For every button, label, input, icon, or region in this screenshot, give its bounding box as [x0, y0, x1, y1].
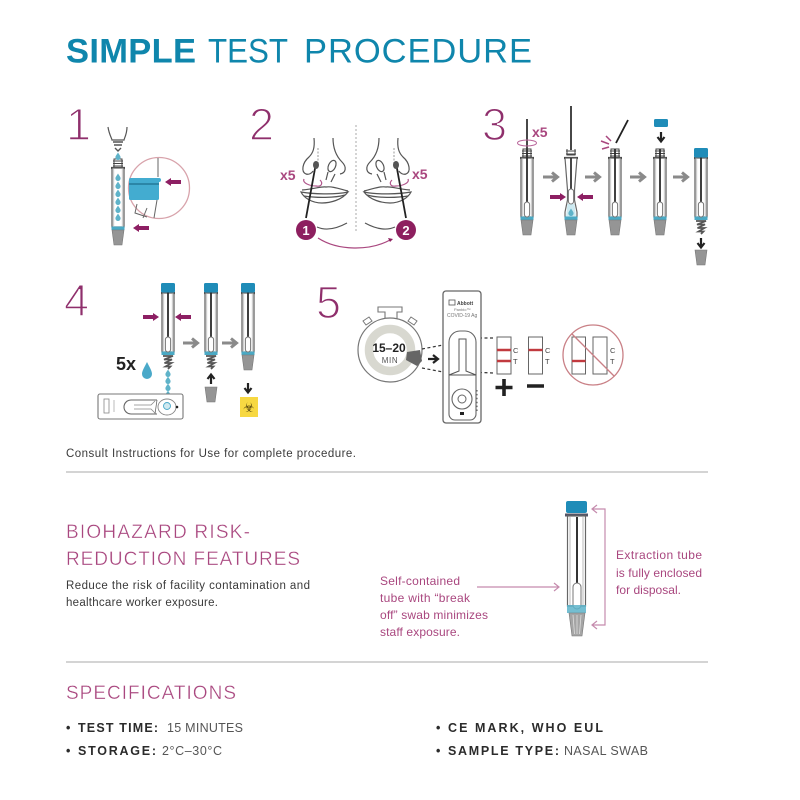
test cassette: Panbio™	[454, 307, 470, 312]
tube a: swab rotated	[520, 119, 534, 235]
title: PROCEDURE	[304, 32, 532, 70]
x5 rotate: x5	[532, 124, 548, 140]
callout: extraction tube enclosed: for disposal.	[616, 583, 681, 597]
centre divider	[355, 125, 357, 233]
callout: extraction tube enclosed: is fully enclosed	[616, 566, 702, 580]
squeeze arrows	[143, 313, 191, 321]
callout: extraction tube enclosed: Extraction tube	[616, 548, 702, 562]
x5 rotate	[518, 124, 548, 146]
spec: test time: •	[66, 721, 70, 735]
x5 left: x5	[280, 167, 296, 183]
stopwatch 15-20 min: 15–20	[372, 341, 406, 355]
icon: large drop	[142, 362, 152, 379]
callout: self-contained tube: off” swab minimizes	[380, 608, 488, 622]
spec: storage: 2°C–30°C	[162, 744, 222, 758]
arrow	[630, 172, 644, 182]
stopwatch 15-20 min: MIN	[382, 356, 398, 365]
title: SIMPLE	[66, 32, 196, 70]
specifications heading: SPECIFICATIONS	[66, 683, 236, 704]
badge 1	[296, 220, 316, 240]
arrow	[543, 172, 558, 182]
spec: sample type: SAMPLE TYPE:	[448, 744, 559, 758]
step number 4: 4	[64, 275, 89, 326]
step 4 panel	[64, 275, 258, 419]
tube b: squeezed	[564, 106, 578, 235]
spec: sample type: NASAL SWAB	[564, 744, 648, 758]
spec: test time: TEST TIME:	[78, 721, 158, 735]
step number 1: 1	[66, 99, 91, 150]
spec: CE mark: CE MARK, WHO EUL	[448, 721, 603, 735]
minus sign	[527, 384, 544, 388]
icon: biohazard bin: ☣	[243, 401, 255, 416]
tube base	[205, 387, 217, 402]
arrow: press cap	[165, 178, 181, 186]
drops of buffer	[115, 152, 121, 221]
tube d: cap added	[653, 119, 668, 235]
plus sign	[496, 379, 512, 396]
biohazard section heading: BIOHAZARD RISK-	[66, 522, 250, 543]
step number 5: 5	[316, 277, 341, 328]
spec: test time: 15 MINUTES	[167, 721, 243, 735]
step number 2: 2	[249, 99, 274, 150]
positive result strip: T	[513, 357, 518, 366]
step 2 panel	[249, 99, 428, 248]
right nostril illustration	[364, 138, 411, 229]
invalid result symbol: T	[610, 357, 615, 366]
positive result strip: C	[513, 346, 519, 355]
spec: CE mark: •	[436, 721, 440, 735]
arrow: press base	[133, 224, 149, 232]
icon: biohazard bin	[240, 397, 258, 417]
spec: sample type: •	[436, 744, 440, 758]
arrow	[673, 172, 688, 182]
callout: self-contained tube: staff exposure.	[380, 625, 460, 639]
drops into test card	[165, 370, 171, 398]
step number 3: 3	[482, 99, 507, 150]
negative result strip: T	[545, 357, 550, 366]
arrow: dispose	[244, 383, 252, 392]
magnified detail circle	[128, 158, 190, 218]
step 1 panel	[66, 99, 190, 245]
icon: extraction tube with drops	[111, 159, 125, 245]
tube with base back on	[241, 283, 255, 370]
step 3 panel	[482, 99, 708, 265]
test cassette	[443, 291, 481, 423]
biohazard section heading: REDUCTION FEATURES	[66, 549, 300, 570]
test cassette: Abbott	[457, 301, 473, 307]
arrow: reattach base	[208, 374, 214, 384]
step 5 panel	[316, 277, 623, 423]
arrow	[428, 355, 438, 363]
tube with base off	[204, 283, 218, 369]
badge 2: 2	[402, 223, 410, 238]
instructions note: Consult Instructions for Use for complete procedure.	[66, 448, 356, 460]
arrow	[183, 338, 198, 348]
title: TEST	[208, 32, 288, 70]
negative result strip	[528, 337, 551, 374]
negative result strip: C	[545, 346, 551, 355]
spec: storage: STORAGE:	[78, 744, 156, 758]
arrow: left to right nostril	[318, 238, 393, 248]
invalid result symbol: C	[610, 346, 616, 355]
biohazard section description: Reduce the risk of facility contamination and	[66, 580, 310, 592]
5x label: 5x	[116, 354, 136, 374]
test cassette: COVID-19 Ag	[447, 313, 478, 319]
callout: self-contained tube: Self-contained	[380, 574, 460, 588]
badge 1: 1	[302, 223, 310, 238]
right swab	[393, 148, 406, 218]
left nostril illustration	[301, 138, 348, 229]
bracket arrow: full tube	[592, 505, 605, 629]
squeeze arrows	[550, 193, 593, 201]
arrow	[585, 172, 600, 182]
arrow	[222, 338, 236, 348]
x5 right: x5	[412, 166, 428, 182]
arrow: to tube	[477, 583, 559, 591]
icon: dropper bottle dripping into tube	[108, 127, 127, 151]
dashed connectors	[422, 338, 493, 373]
tube squeezed with drops	[161, 283, 175, 369]
callout: self-contained tube: tube with “break	[380, 591, 471, 605]
left swab	[306, 148, 319, 218]
biohazard section description: healthcare worker exposure.	[66, 597, 218, 609]
invalid result symbol	[563, 325, 623, 385]
positive result strip	[497, 337, 519, 374]
stopwatch 15-20 min	[358, 307, 422, 382]
illustration: large extraction tube	[565, 501, 588, 636]
spec: storage: •	[66, 744, 70, 758]
tube e: capped, base removed	[694, 148, 708, 265]
tube c: swab broken	[601, 120, 628, 235]
title	[66, 32, 532, 70]
badge 2	[396, 220, 416, 240]
test card, horizontal	[98, 394, 183, 419]
